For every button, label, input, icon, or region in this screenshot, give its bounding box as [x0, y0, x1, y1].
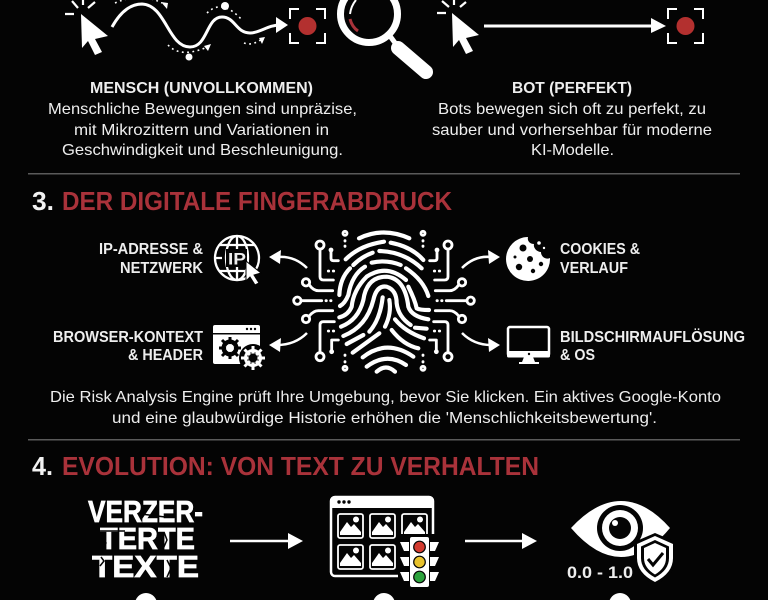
- icon: cursor with click sparks: [65, 0, 108, 55]
- left circuits: [294, 231, 347, 370]
- icon: distorted text: TEXTE: [92, 549, 199, 584]
- icon: cookie: [506, 237, 550, 281]
- arrow: to browser: [269, 333, 307, 352]
- label: score range: 0.0 - 1.0: [567, 563, 633, 582]
- traffic light: [398, 534, 440, 590]
- step marker 2: [373, 593, 395, 600]
- icon: monitor: [507, 327, 550, 364]
- label: IP address: NETZWERK: [120, 260, 203, 277]
- label: browser context: BROWSER-KONTEXT: [53, 329, 203, 346]
- label: cookies: COOKIES &: [560, 241, 640, 258]
- icon: browser with gears: [213, 325, 267, 372]
- heading: section 4: EVOLUTION: VON TEXT ZU VERHALTEN: [62, 451, 539, 481]
- step marker 3: [609, 593, 631, 600]
- icon: fingerprint with circuits: [294, 231, 474, 372]
- heading: section 3: DER DIGITALE FINGERABDRUCK: [62, 186, 452, 216]
- text: human description: Menschliche Bewegungen sind unpräzise,: [48, 101, 357, 118]
- heading: section 4: 4.: [32, 451, 53, 481]
- label: screen resolution: & OS: [560, 347, 595, 364]
- label: browser context: & HEADER: [128, 347, 203, 364]
- panel: human movement: [48, 0, 357, 159]
- text: human description: [48, 101, 357, 159]
- text: bot description: [432, 101, 712, 159]
- text: human description: Geschwindigkeit und Beschleunigung.: [62, 142, 343, 159]
- label: screen resolution: BILDSCHIRMAUFLÖSUNG: [560, 327, 745, 346]
- icon: image captcha with traffic light: [331, 497, 440, 590]
- arrow: to IP: [269, 250, 307, 268]
- arrow: second step: [465, 533, 537, 549]
- label: IP address: IP-ADRESSE &: [99, 241, 203, 258]
- text: risk analysis description: Die Risk Analysis Engine prüft Ihre Umgebung, bevor Sie klicken. Ein aktives Google-Konto: [50, 389, 721, 406]
- icon: distorted text: TERTE: [100, 521, 195, 556]
- text: bot description: sauber und vorhersehbar für moderne: [432, 122, 712, 139]
- icon: distorted text: [88, 494, 203, 584]
- icon: globe with IP: IP: [228, 250, 246, 268]
- step marker 1: [135, 593, 157, 600]
- text: risk analysis description: und eine glaubwürdige Historie erhöhen die 'Menschlichkeitsbewertung'.: [112, 410, 657, 427]
- arrow: first step: [230, 533, 303, 549]
- fingerprint ridges: [339, 232, 429, 372]
- icon: wavy human path: [112, 0, 288, 60]
- label: IP address: [99, 241, 203, 277]
- heading: bot: BOT (PERFEKT): [512, 80, 632, 97]
- text: bot description: Bots bewegen sich oft zu perfekt, zu: [438, 101, 706, 118]
- text: bot description: KI-Modelle.: [531, 142, 614, 159]
- text: human description: mit Mikrozittern und Variationen in: [74, 122, 329, 139]
- arrow: to cookies: [462, 250, 500, 268]
- arrow: to screen: [462, 333, 500, 352]
- icon: magnifying glass: [340, 0, 426, 72]
- icon: target: [290, 9, 325, 43]
- panel: digital fingerprint: [32, 186, 745, 427]
- icon: eye with shield: [571, 501, 676, 585]
- icon: distorted text: VERZER-: [88, 494, 203, 529]
- label: cookies: [560, 241, 640, 277]
- panel: bot movement: [432, 0, 712, 159]
- heading: section 3: 3.: [32, 186, 54, 216]
- icon: target: [668, 9, 703, 43]
- arrow: straight bot path: [484, 18, 666, 33]
- icon: cursor with click sparks: [437, 0, 479, 54]
- text: risk analysis description: [50, 389, 721, 427]
- right circuits: [421, 231, 474, 370]
- label: screen resolution: [560, 327, 745, 364]
- heading: human: MENSCH (UNVOLLKOMMEN): [90, 80, 313, 97]
- icon: globe with IP: [215, 236, 261, 285]
- label: cookies: VERLAUF: [560, 260, 628, 277]
- panel: evolution: [32, 451, 676, 600]
- label: browser context: [53, 329, 203, 364]
